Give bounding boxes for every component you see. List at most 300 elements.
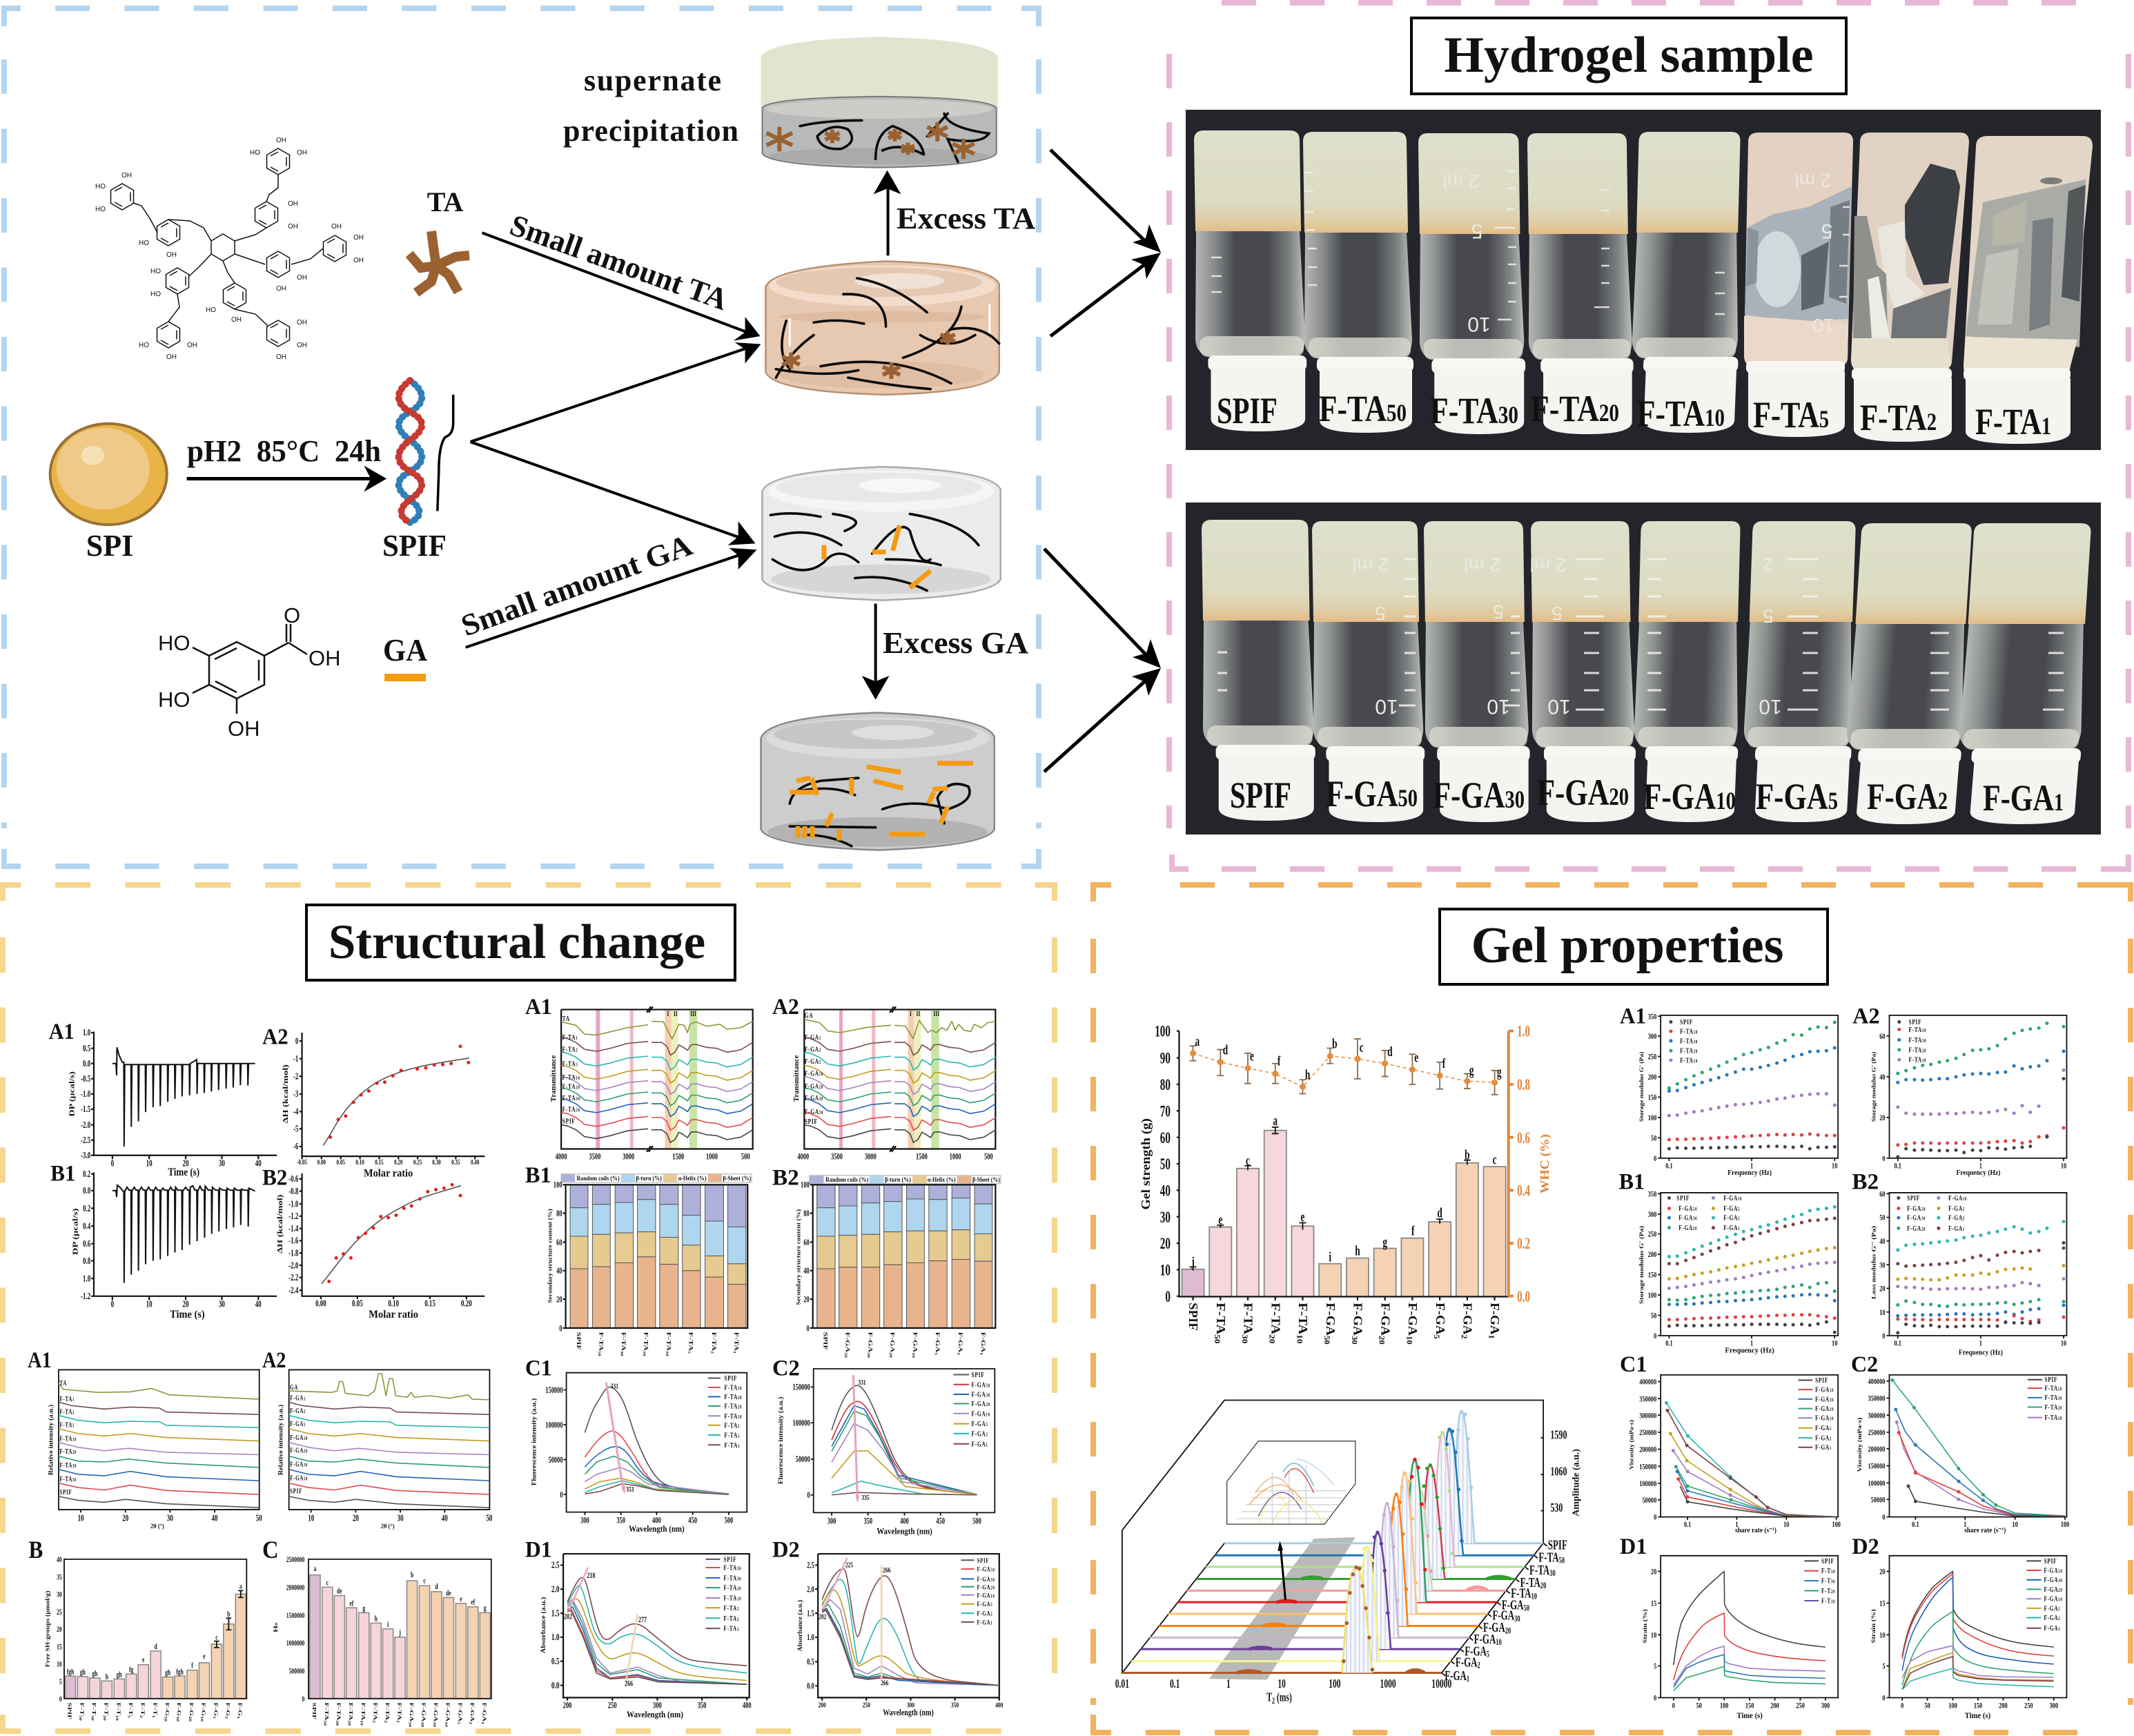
chart: C H0: 2 [469, 1722, 473, 1725]
chart: UV absorbance D2: 2.0 [807, 1586, 814, 1594]
chart: viscosity C1: Viscosity (mPa·s) [1629, 1420, 1635, 1470]
legend: F-TA10 [2044, 1414, 2062, 1421]
sample labels: TA [1217, 388, 2051, 442]
chart: gel strength and WHC: f [1442, 1055, 1445, 1071]
chart: B free SH groups: 5 [127, 1715, 130, 1719]
chart: rheology B2: 10 [1879, 1309, 1886, 1317]
chart: XRD A2: 10 [308, 1514, 314, 1523]
chart: rheology B1: 100 [1648, 1291, 1656, 1300]
chart: viscosity C2: 1 [1964, 1521, 1966, 1529]
chart: rheology B2: 0 [1882, 1332, 1886, 1341]
chart: ITC B1 raw: 30 [219, 1300, 225, 1309]
chart: ITC B1 raw: 0.0 [83, 1187, 90, 1196]
chart: rheology A1: 100 [1648, 1114, 1656, 1123]
chart: gel strength and WHC: i [1329, 1249, 1331, 1265]
chart: UV absorbance D2: 300 [907, 1701, 914, 1709]
chart: XRD A2: F-GA50 [290, 1474, 308, 1482]
chart: rheology B2: 0.1 [1895, 1339, 1901, 1348]
legend: F-GA1 [1815, 1443, 1832, 1452]
chart: FTIR A2: Transmittance [792, 1055, 800, 1102]
chart: XRD A1: 20 [122, 1514, 128, 1523]
legend: F-TA10 [724, 1412, 742, 1420]
label: small amount GA: Small amount GA [457, 528, 696, 643]
chart: rheology A1: 1 [1750, 1162, 1753, 1171]
chart: B free SH groups: F-T [91, 1702, 97, 1715]
chart: gel strength and WHC: 10 [1404, 1336, 1413, 1345]
chart: FTIR A1: 3500 [589, 1153, 600, 1162]
series labels: F-GA [1483, 1620, 1505, 1635]
chart: creep D2: 20 [1879, 1568, 1886, 1577]
series labels [1445, 1537, 1567, 1684]
chart: B free SH groups: e [203, 1652, 206, 1661]
chart: rheology A2: 10 [2061, 1162, 2066, 1171]
chart: gel strength and WHC: 0 [1165, 1289, 1171, 1306]
chart: FTIR A2: 3000 [865, 1153, 877, 1162]
chart: C H0: e [460, 1595, 462, 1604]
chart: C H0: de [337, 1587, 342, 1596]
chart: rheology A1: 250 [1648, 1053, 1656, 1062]
chart: UV absorbance D2: 2.5 [807, 1561, 814, 1570]
arrow: SPIF to GA dish [471, 442, 755, 545]
chart: gel strength and WHC: d [1223, 1042, 1228, 1057]
chart: B free SH groups: fg [129, 1666, 133, 1675]
chart: T2 relaxation 3D waterfall: 530 [1550, 1501, 1563, 1515]
chart: creep D1: 150 [1745, 1701, 1754, 1710]
icon: gallic acid molecule [158, 603, 341, 741]
chart: ITC B2 fit: -1.0 [288, 1200, 299, 1209]
heading: Hydrogel sample [1411, 18, 1846, 94]
chart: ITC B2 fit: -2.4 [288, 1286, 299, 1296]
chart: C H0: 2500000 [286, 1556, 304, 1565]
chart: rheology B2: 60 [1879, 1190, 1886, 1199]
legend: F-TA1 [723, 1624, 739, 1632]
chart: gel strength and WHC: F-GA [1461, 1303, 1474, 1348]
chart: UV absorbance D1: Absorbance (a.u.) [540, 1597, 547, 1653]
legend: F-TA20 [723, 1583, 741, 1592]
icon: tannic acid molecule: OH [353, 234, 364, 242]
chart: UV absorbance D2: 266 [881, 1679, 889, 1687]
chart: rheology B2: B2 [1852, 1169, 1879, 1195]
chart: C H0: F-GA [457, 1702, 463, 1722]
legend: F-TA20 [1909, 1046, 1926, 1054]
chart: gel strength and WHC: F-GA [1488, 1303, 1502, 1348]
vial: F-TA2 milky [1851, 133, 1969, 442]
chart: rheology B2 [1852, 1169, 2066, 1357]
peak data points [1344, 1412, 1471, 1670]
legend [1899, 1194, 1967, 1232]
chart: B free SH groups: 20 [103, 1715, 106, 1721]
chart: B free SH groups: 2 [224, 1716, 228, 1719]
chart: UV absorbance D2: 350 [951, 1701, 959, 1709]
chart: B free SH groups: h [106, 1672, 108, 1681]
chart: C H0: F-GA [481, 1702, 487, 1722]
icon: gallic acid molecule: HO [158, 687, 190, 712]
chart: C H0: 2 [384, 1720, 387, 1724]
chart: viscosity C2: 100 [2061, 1521, 2069, 1529]
legend: F-GA30 [972, 1390, 990, 1398]
chart: creep D1: 0 [1672, 1701, 1675, 1710]
legend: SPIF [2044, 1557, 2057, 1565]
series labels: 5 [1487, 1650, 1490, 1659]
chart: secondary structure B2: F-GA [957, 1332, 963, 1352]
chart: FTIR A2 [772, 995, 996, 1162]
chart: creep D1: Strain (%) [1642, 1609, 1648, 1644]
legend: F-TA10 [1909, 1056, 1926, 1064]
legend: F-GA30 [2044, 1576, 2063, 1583]
legend: F-GA30 [1678, 1214, 1697, 1222]
chart: FTIR A2: F-GA2 [805, 1045, 821, 1053]
chart: B free SH groups: 30 [90, 1715, 95, 1721]
chart: B free SH groups: F-G [164, 1702, 170, 1716]
chart: ITC A2 fit: 0.00 [317, 1158, 326, 1167]
chart: XRD A2: F-GA5 [290, 1420, 306, 1428]
chart: gel strength and WHC: 1 [1487, 1335, 1496, 1339]
arrow: excess GA [862, 604, 890, 700]
chart: ITC B1 raw: 0 [111, 1300, 114, 1309]
chart: C H0: 10 [444, 1722, 448, 1728]
chart: secondary structure B2: 100 [801, 1181, 810, 1190]
chart: creep D1: Time (s) [1736, 1712, 1763, 1720]
legend: SPIF [1680, 1018, 1693, 1026]
chart: ITC A1 raw: DP (μcal/s) [68, 1071, 76, 1117]
legend: F-GA2 [1948, 1214, 1965, 1222]
sample labels: TA: F-TA50 [1319, 388, 1407, 429]
legend [706, 1555, 741, 1632]
chart: rheology A2: 60 [1879, 1033, 1886, 1042]
chart: creep D2: 0 [1901, 1701, 1903, 1710]
chart: creep D2: 15 [1879, 1599, 1886, 1608]
chart: B free SH groups: 40 [57, 1556, 62, 1565]
chart: viscosity C2: 150000 [1868, 1462, 1886, 1471]
chart: B free SH groups: 20 [57, 1626, 62, 1635]
chart: creep D2: 200 [1999, 1701, 2008, 1710]
legend: F-GA10 [1948, 1194, 1967, 1202]
chart: secondary structure B1: 30 [620, 1351, 624, 1357]
panel border: preparation schematic [4, 8, 1039, 866]
chart: C H0: F-GA [420, 1702, 427, 1722]
chart: UV absorbance D1: Wavelength (nm) [627, 1710, 683, 1719]
legend: SPIF [1907, 1194, 1920, 1202]
chart: XRD A1: TA [59, 1379, 67, 1387]
chart: gel strength and WHC: 30 [1350, 1336, 1358, 1345]
chart: UV absorbance D2: D2 [772, 1538, 800, 1562]
chart: viscosity C1: share rate (s⁻¹) [1735, 1526, 1776, 1534]
chart: gel strength and WHC: a [1195, 1033, 1200, 1049]
legend: F-GA50 [1815, 1385, 1834, 1394]
chart: B free SH groups: 0 [59, 1695, 62, 1704]
panel border: structural change [3, 885, 1055, 1731]
chart: UV absorbance D1: 300 [653, 1701, 662, 1710]
chart: C H0: F-TA [360, 1702, 366, 1720]
legend: F-TA50 [724, 1383, 742, 1392]
chart: rheology A1: Storage modulus G' (Pa) [1638, 1052, 1645, 1122]
chart: XRD A2: 40 [442, 1514, 448, 1523]
chart: viscosity C1: 100000 [1639, 1480, 1656, 1488]
chart: B free SH groups: F-T [115, 1702, 121, 1715]
scale marks: 5 [1763, 605, 1774, 627]
chart: fluorescence C2: 0 [807, 1492, 810, 1500]
chart: rheology B1: 10 [1832, 1339, 1837, 1348]
legend [961, 1557, 995, 1626]
chart: ITC A1 raw: 40 [255, 1159, 262, 1169]
chart: rheology A1: Frequency (Hz) [1727, 1169, 1772, 1177]
chart: B free SH groups: 15 [57, 1643, 62, 1652]
panel: rheology charts [1619, 1004, 2069, 1720]
chart: fluorescence C2 [772, 1356, 995, 1537]
chart: B free SH groups: 50 [164, 1716, 167, 1722]
arrow: excess TA [874, 170, 901, 255]
chart: creep D1: 20 [1651, 1568, 1656, 1577]
chart: gel strength and WHC: f [1411, 1223, 1415, 1238]
chart: UV absorbance D2: 200 [819, 1701, 826, 1709]
chart: B free SH groups: F-T [139, 1702, 146, 1715]
scale marks: 10 [1812, 315, 1834, 336]
label: TA: TA [427, 186, 463, 217]
chart: secondary structure B1: 0 [559, 1325, 562, 1334]
chart: XRD A1: A1 [28, 1348, 52, 1373]
chart: B free SH groups: F-G [237, 1702, 243, 1716]
legend: F-GA5 [1723, 1205, 1740, 1212]
chart: FTIR A1: F-TA30 [562, 1094, 580, 1102]
chart: secondary structure B2: F-GA [912, 1332, 918, 1352]
chart: rheology A1: 350 [1648, 1013, 1656, 1022]
icon: tannic acid molecule: OH [297, 274, 307, 282]
legend: F-GA5 [1948, 1205, 1965, 1212]
chart: rheology B2: 50 [1879, 1214, 1886, 1222]
chart: T2 relaxation 3D waterfall: 1590 [1550, 1428, 1567, 1442]
chart: gel strength and WHC: F-GA [1433, 1303, 1447, 1348]
chart: gel strength and WHC: b [1332, 1036, 1338, 1051]
chart: ITC A2 fit: 0.10 [355, 1158, 364, 1167]
chart: rheology A1: A1 [1620, 1004, 1646, 1029]
chart: gel strength and WHC: d [1387, 1044, 1393, 1060]
chart: secondary structure B2: F-GA [934, 1332, 940, 1352]
chart: XRD A2: Relative intensity (a.u.) [278, 1405, 284, 1475]
icon: tannic acid molecule: OH [276, 285, 286, 293]
chart: rheology B1: 200 [1648, 1251, 1656, 1260]
legend: α-Helix (%) [678, 1175, 707, 1182]
inset zoom [1227, 1441, 1355, 1524]
chart: fluorescence C2: Fluorescence intensity (a.u.) [778, 1396, 784, 1484]
chart: C H0: H0 [273, 1622, 279, 1632]
legend: F-GA20 [1907, 1225, 1926, 1232]
chart: gel strength and WHC: SPIF [1186, 1303, 1200, 1331]
chart: gel strength and WHC: 0.2 [1517, 1236, 1530, 1253]
chart: ITC B1 raw: 40 [255, 1300, 262, 1309]
chart: gel strength and WHC: F-GA [1406, 1303, 1420, 1348]
chart: rheology B2: 10 [2061, 1339, 2066, 1348]
chart: gel strength and WHC: 40 [1160, 1183, 1171, 1200]
chart: XRD A2: F-GA2 [290, 1407, 306, 1414]
chart: secondary structure B2: 40 [803, 1267, 810, 1276]
chart: fluorescence C2: 500 [972, 1517, 981, 1526]
icon: tannic acid molecule: HO [95, 183, 106, 191]
chart: rheology B2: 40 [1879, 1238, 1886, 1246]
chart: UV absorbance D2: 0.5 [807, 1658, 814, 1667]
chart: gel strength and WHC: 0.0 [1517, 1289, 1530, 1306]
chart: FTIR A1: 3000 [623, 1153, 634, 1162]
icon: tannic acid molecule: HO [250, 149, 260, 157]
axis labels: 10000 [1431, 1678, 1451, 1691]
chart: C H0: F-TA [335, 1702, 342, 1720]
chart: secondary structure B1: F-TA [643, 1332, 649, 1351]
scale marks: 10 [1467, 313, 1491, 335]
sample labels: TA: F-TA10 [1637, 393, 1725, 434]
chart: gel strength and WHC: d [1437, 1205, 1442, 1220]
chart: C H0: 20 [347, 1720, 351, 1726]
series labels: 20 [1505, 1626, 1511, 1636]
chart: UV absorbance D2: 1.0 [807, 1634, 814, 1643]
legend: Random coils (%) [825, 1176, 869, 1183]
chart: FTIR A2: I [910, 1010, 912, 1017]
chart: secondary structure B1: 5 [687, 1351, 691, 1354]
chart: XRD A1: 50 [256, 1514, 262, 1523]
chart: C H0 [262, 1536, 491, 1728]
chart: C H0: ef [349, 1599, 354, 1608]
chart: creep D2: Time (s) [1965, 1712, 1990, 1720]
chart: ITC B2 fit: ΔH (kcal/mol) [276, 1195, 284, 1254]
chart: C H0: 10 [360, 1720, 363, 1726]
chart: fluorescence C2: 335 [861, 1494, 870, 1501]
scale marks: 2 ml [1443, 170, 1479, 192]
chart: FTIR A2: 1000 [950, 1153, 961, 1162]
chart: XRD A2: 2θ (°) [381, 1523, 395, 1530]
chart: UV absorbance D2: 202 [819, 1612, 827, 1621]
chart: gel strength and WHC: a [1273, 1113, 1278, 1129]
chart: secondary structure B1: 20 [642, 1351, 646, 1357]
chart: ITC B1 raw: Time (s) [170, 1308, 205, 1320]
chart: gel strength and WHC: c [1246, 1153, 1250, 1169]
chart: ITC B1 raw: B1 [50, 1161, 76, 1187]
chart: C H0: h [375, 1615, 378, 1623]
chart: B free SH groups: Free SH-groups (μmol/g) [45, 1590, 51, 1667]
chart: viscosity C2: 0 [1882, 1514, 1886, 1522]
chart: secondary structure B2: 5 [934, 1352, 937, 1356]
arrow to inset [1278, 1541, 1285, 1600]
WHC line [1190, 1039, 1498, 1095]
legend: SPIF [724, 1374, 737, 1382]
legend: F-GA20 [977, 1583, 995, 1591]
chart: viscosity C2: 300000 [1868, 1412, 1886, 1421]
legend: F-GA5 [972, 1420, 988, 1428]
chart: fluorescence C2: 331 [858, 1378, 866, 1386]
chart: ITC B1 raw: -1.2 [81, 1291, 90, 1302]
chart: ITC A1 raw: -2.0 [81, 1120, 90, 1130]
chart: gel strength and WHC: 50 [1322, 1336, 1331, 1345]
chart: rheology A2: Storage modulus G' (Pa) [1871, 1052, 1877, 1122]
chart: gel strength and WHC: 20 [1268, 1334, 1276, 1343]
chart: viscosity C2: 50000 [1871, 1496, 1886, 1505]
series labels: 50 [1523, 1603, 1529, 1613]
chart: XRD A1 [28, 1348, 262, 1530]
chart: UV absorbance D1: 200 [563, 1701, 571, 1710]
chart: viscosity C1: 1 [1735, 1521, 1739, 1529]
chart: UV absorbance D1: 277 [638, 1616, 647, 1624]
chart: XRD A1: F-TA1 [59, 1395, 75, 1403]
icon: tannic acid molecule: OH [297, 319, 307, 326]
icon: gallic acid molecule: HO [158, 631, 190, 655]
chart: C H0: 1500000 [286, 1612, 304, 1621]
chart: ITC B2 fit: 0.05 [352, 1299, 363, 1309]
axis labels: 0.01 [1115, 1678, 1129, 1691]
legend: F-GA50 [1907, 1205, 1926, 1212]
chart: XRD A1: 40 [212, 1514, 218, 1523]
chart: rheology A2 [1852, 1004, 2066, 1177]
chart: creep D1: 0 [1654, 1694, 1656, 1703]
legend: F-GA30 [1815, 1395, 1834, 1403]
legend: F-TA30 [1680, 1037, 1698, 1045]
sample labels: TA: F-TA30 [1430, 390, 1518, 431]
chart: FTIR A1: F-TA5 [562, 1060, 578, 1068]
chart: gel strength and WHC: 5 [1432, 1335, 1440, 1339]
chart: gel strength and WHC: 70 [1160, 1104, 1171, 1120]
legend: SPIF [2044, 1376, 2057, 1383]
chart: B free SH groups: gh [117, 1670, 122, 1679]
chart: ITC A2 fit: -0.05 [297, 1158, 307, 1167]
legend: F-GA20 [972, 1400, 990, 1407]
chart: ITC A1 raw: -3.0 [81, 1151, 90, 1161]
chart: ITC B1 raw [50, 1161, 277, 1320]
legend: β-Sheet (%) [723, 1175, 752, 1182]
legend: F-TA20 [2044, 1403, 2062, 1411]
chart: FTIR A2: F-GA1 [805, 1033, 821, 1041]
chart: B free SH groups: F-T [79, 1702, 85, 1715]
chart: secondary structure B2: 10 [911, 1352, 915, 1358]
legend [1899, 1018, 1926, 1064]
chart: C H0: 30 [335, 1720, 339, 1726]
chart: viscosity C1: 50000 [1642, 1496, 1656, 1505]
sample labels: TA: F-TA20 [1531, 388, 1619, 429]
chart: XRD A2: 30 [398, 1514, 404, 1523]
legend: F-TA20 [1680, 1047, 1698, 1055]
chart: gel strength and WHC: Gel strength (g) [1139, 1118, 1153, 1210]
legend: F-GA10 [1815, 1414, 1834, 1422]
chart: rheology B2: 20 [1879, 1285, 1886, 1294]
chart: rheology B1: Frequency (Hz) [1725, 1346, 1774, 1355]
chart: viscosity C2: 10 [2012, 1521, 2018, 1529]
chart: UV absorbance D1: 266 [625, 1679, 633, 1688]
chart: FTIR A2: II [917, 1010, 921, 1017]
chart: gel strength and WHC: 2 [1460, 1335, 1468, 1339]
chart: rheology B1: 1 [1750, 1339, 1753, 1348]
chart: creep D1: D1 [1620, 1534, 1647, 1559]
chart: secondary structure B1: F-TA [711, 1332, 716, 1351]
photo: GA hydrogel vials [1186, 503, 2101, 835]
chart: fluorescence C2: 300 [828, 1517, 836, 1526]
chart: secondary structure B2: 1 [979, 1352, 983, 1356]
chart: FTIR A1: F-TA2 [562, 1045, 578, 1053]
chart: gel strength and WHC: 80 [1160, 1077, 1171, 1094]
icon: tannic acid molecule: HO [139, 342, 149, 349]
chart: creep D2: 0 [1882, 1694, 1886, 1703]
icon: tannic acid molecule: OH [353, 257, 364, 264]
scale marks [1217, 554, 2064, 718]
chart: creep D2: 150 [1974, 1701, 1982, 1710]
chart: secondary structure B2: F-GA [844, 1332, 850, 1352]
chart: gel strength and WHC: e [1218, 1212, 1223, 1227]
chart: gel strength and WHC: 20 [1160, 1236, 1171, 1253]
chart: C H0: 2000000 [286, 1583, 304, 1592]
chart: T2 relaxation 3D waterfall: Amplitude (a.u.) [1571, 1449, 1581, 1516]
series labels: 50 [1559, 1556, 1565, 1566]
chart: gel strength and WHC: 100 [1155, 1024, 1171, 1041]
chart: FTIR A1: F-TA20 [562, 1082, 580, 1091]
chart: B free SH groups: F-T [103, 1702, 109, 1715]
chart: fluorescence C1: 353 [626, 1485, 634, 1493]
chart: secondary structure B2: F-GA [889, 1332, 895, 1352]
chart: C H0: F-TA [324, 1702, 329, 1720]
chart: C H0: F-TA [384, 1702, 390, 1720]
